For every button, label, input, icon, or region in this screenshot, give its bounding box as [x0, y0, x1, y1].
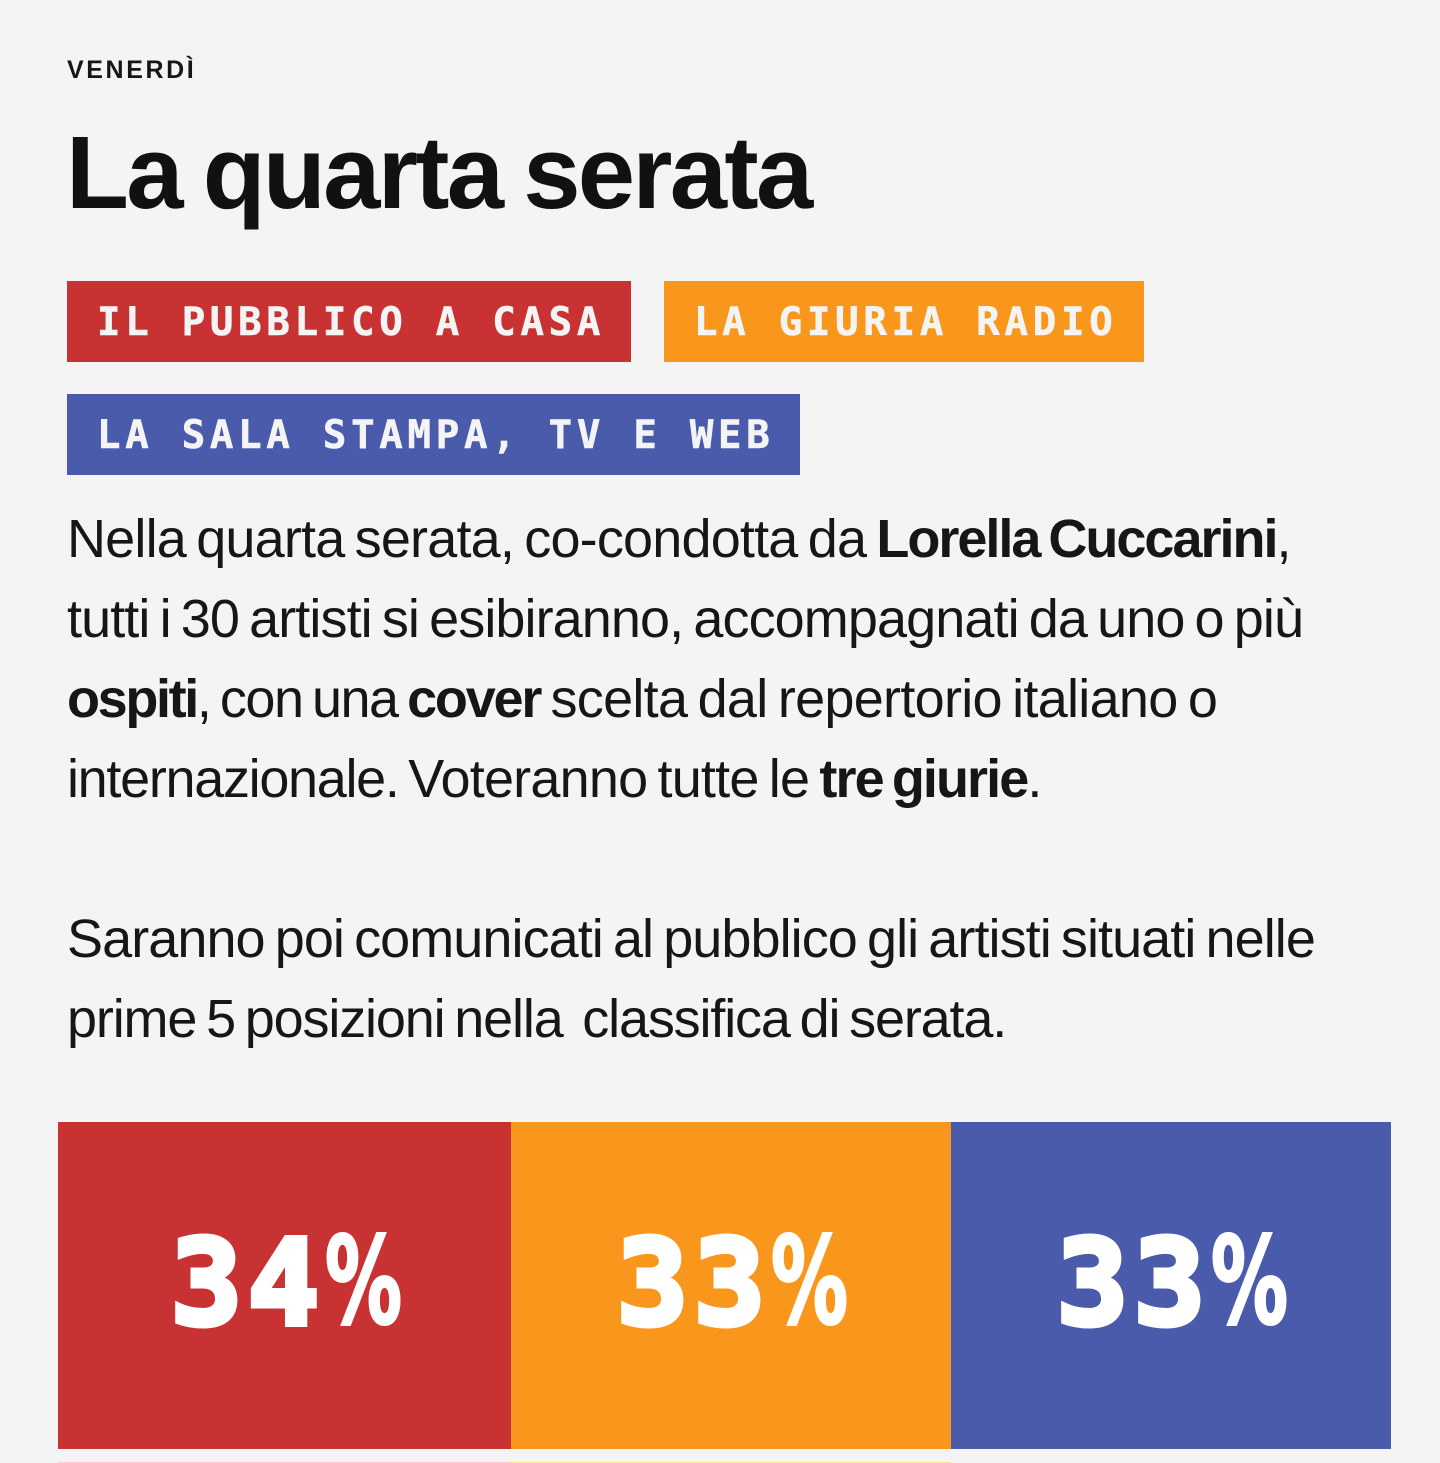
title: La quarta serata — [66, 115, 811, 230]
bar segment: sala stampa 33%: % — [1211, 1213, 1288, 1352]
tag: la giuria radio — [664, 281, 1144, 362]
text block: second paragraph — [67, 909, 1315, 1049]
bar segment: giuria radio 33%: 33 — [617, 1214, 771, 1352]
text block: second paragraph: prime 5 posizioni nella classifica di serata. — [67, 989, 1006, 1049]
bar segment: giuria radio 33% — [511, 1122, 951, 1449]
text block: first paragraph — [67, 509, 1303, 809]
tag: il pubblico a casa: IL PUBBLICO A CASA — [97, 300, 605, 345]
bar segment: pubblico 34% — [58, 1122, 511, 1449]
bar segment: sala stampa 33% — [951, 1122, 1391, 1449]
tag: il pubblico a casa — [67, 281, 631, 362]
tag: la sala stampa, tv e web — [67, 394, 800, 475]
bar segment: pubblico 34%: % — [325, 1213, 402, 1352]
tag: la giuria radio: LA GIURIA RADIO — [694, 300, 1117, 345]
tag: la sala stampa, tv e web: LA SALA STAMPA, TV E WEB — [97, 413, 775, 458]
bottom strip: yellow — [511, 1462, 951, 1463]
bottom strip: pink — [58, 1462, 511, 1463]
text block: first paragraph: ospiti, con una cover scelta dal repertorio italiano o — [67, 669, 1217, 729]
bar segment: sala stampa 33%: 33 — [1057, 1214, 1211, 1352]
bar segment: pubblico 34%: 34 — [171, 1214, 325, 1352]
eyebrow: day label: VENERDÌ — [67, 56, 196, 84]
text block: first paragraph: tutti i 30 artisti si esibiranno, accompagnati da uno o più — [67, 589, 1303, 649]
text block: second paragraph: Saranno poi comunicati al pubblico gli artisti situati nelle — [67, 909, 1315, 969]
bar segment: giuria radio 33%: % — [771, 1213, 848, 1352]
text block: first paragraph: internazionale. Voteranno tutte le tre giurie. — [67, 749, 1041, 809]
text block: first paragraph: Nella quarta serata, co-condotta da Lorella Cuccarini, — [67, 509, 1291, 569]
